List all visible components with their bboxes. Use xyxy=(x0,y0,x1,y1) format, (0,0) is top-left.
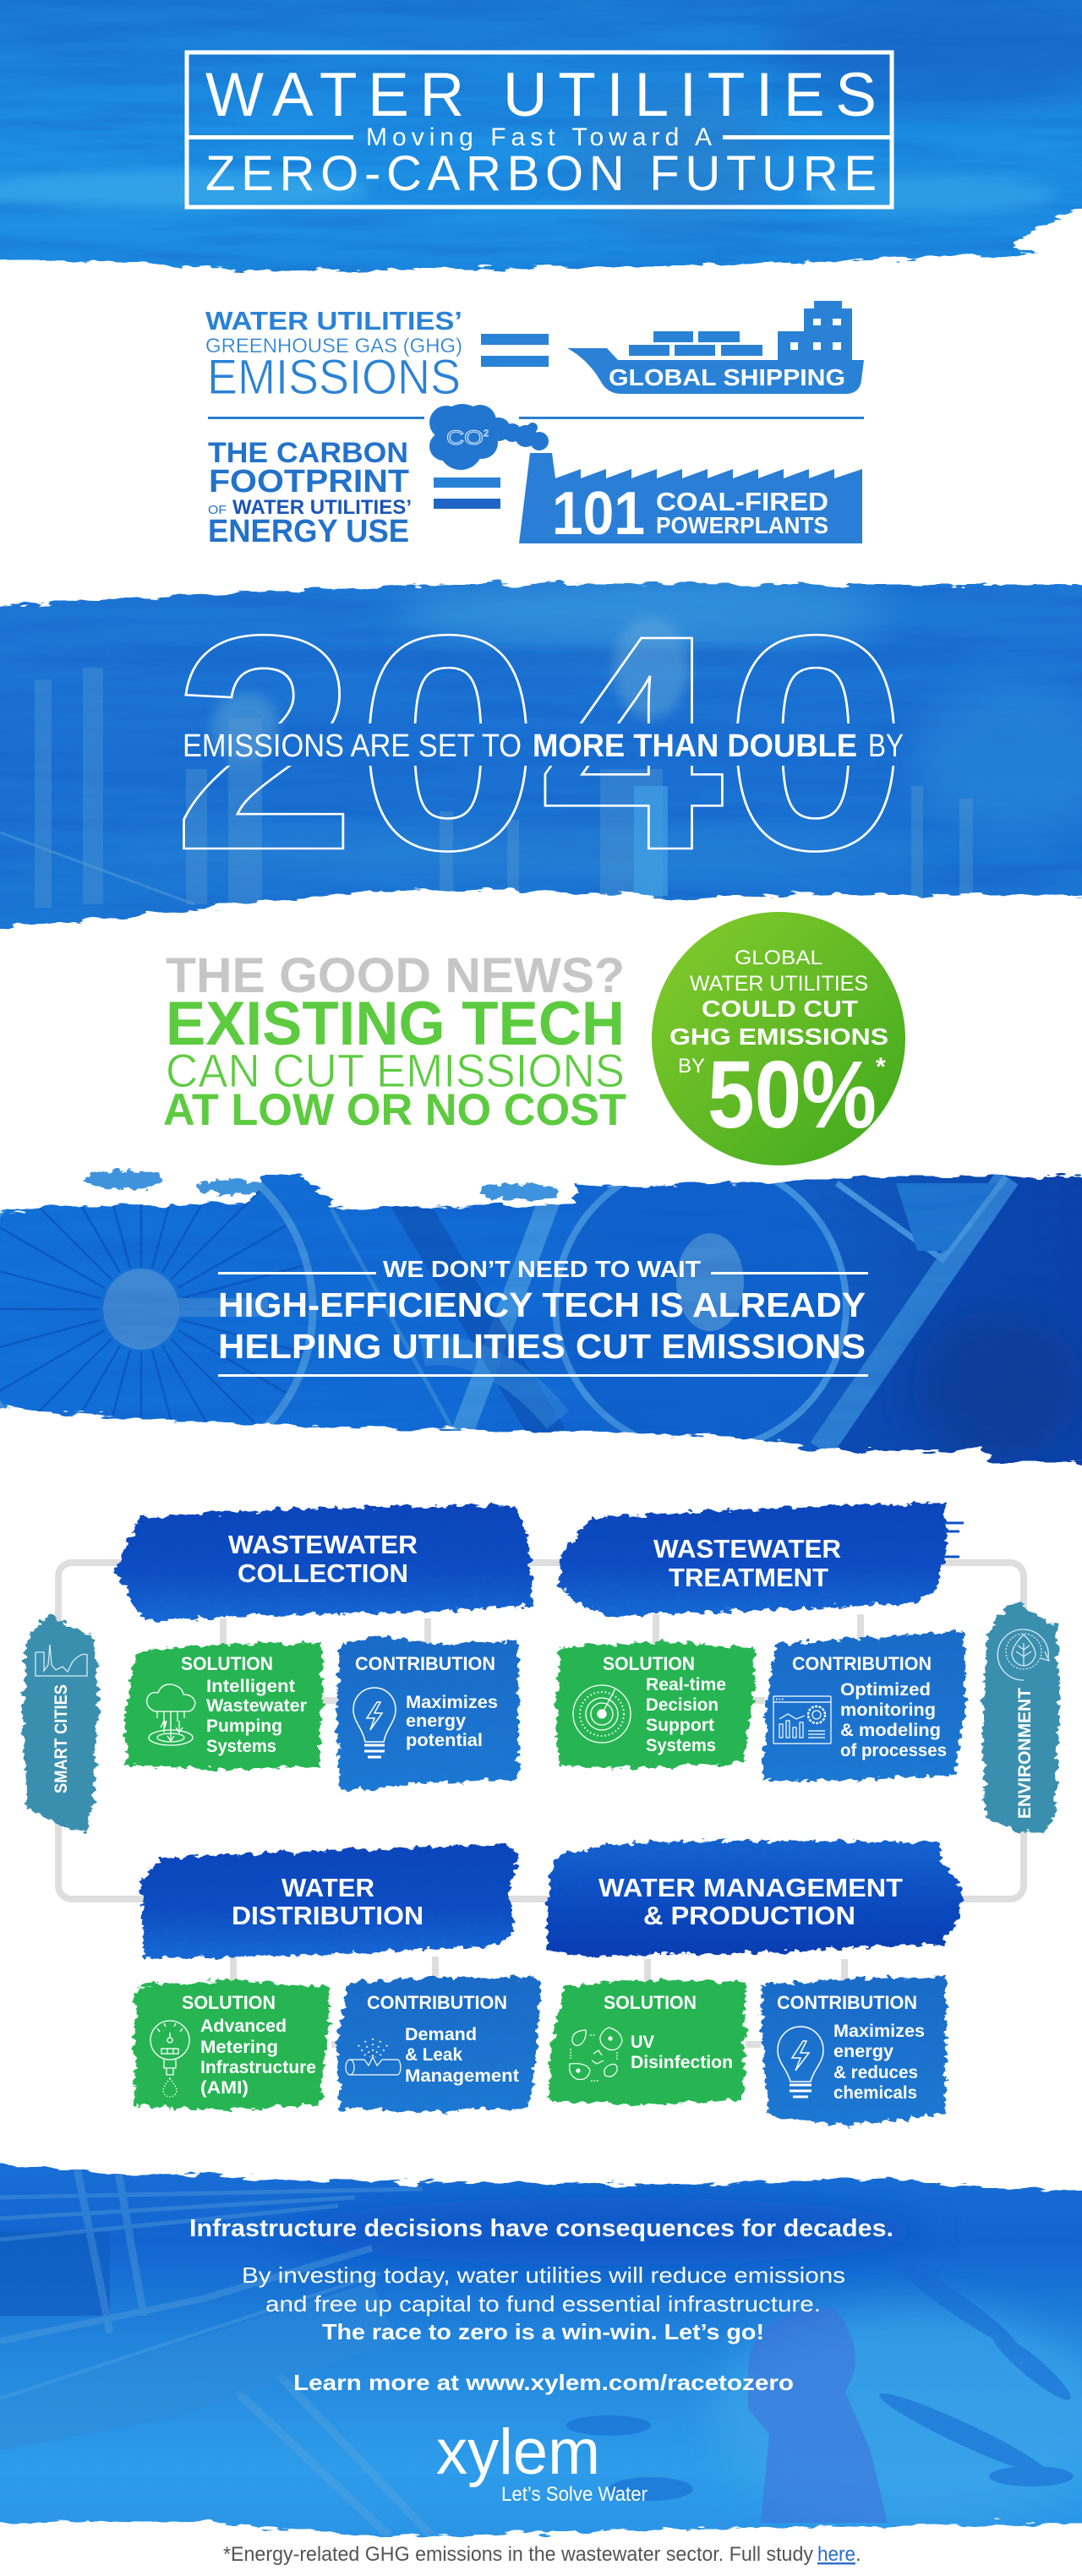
panel: environment xyxy=(982,1603,1060,1834)
heading: carbon footprint xyxy=(208,437,412,549)
contribution card: CONTRIBUTION xyxy=(367,1992,507,2013)
contribution card: & Leak xyxy=(405,2045,462,2065)
contribution card: of processes xyxy=(840,1741,947,1760)
icon: rain cloud over ripple xyxy=(147,1684,195,1745)
contribution card xyxy=(336,1636,519,1792)
icon: light bulb xyxy=(778,2027,823,2097)
brush heading: WASTEWATER xyxy=(653,1534,841,1564)
subtitle with rules: Moving Fast Toward A xyxy=(366,123,712,151)
title: WATER UTILITIES: WATER UTILITIES xyxy=(205,61,877,129)
solution card: SOLUTION xyxy=(181,1653,273,1674)
contribution card: Maximizes xyxy=(406,1693,498,1712)
panel: wastewater treatment xyxy=(556,1503,965,1782)
label: smart cities: SMART CITIES xyxy=(52,1684,71,1793)
splash marks xyxy=(85,1171,560,1200)
contribution card: Maximizes xyxy=(833,2022,925,2041)
heading: carbon footprint: THE CARBON xyxy=(208,437,408,469)
brush heading xyxy=(548,1841,964,1957)
text block: closing message xyxy=(189,2215,893,2395)
title frame xyxy=(187,52,892,207)
contribution card: CONTRIBUTION xyxy=(355,1653,495,1674)
solution card xyxy=(134,1979,330,2109)
contribution card: CONTRIBUTION xyxy=(777,1992,917,2013)
text block: closing message: Learn more at www.xylem.com/racetozero xyxy=(293,2370,794,2395)
solution card: Real-time xyxy=(646,1675,726,1695)
solution card: Disinfection xyxy=(631,2053,733,2072)
text block: closing message: By investing today, water utilities will reduce emissions xyxy=(242,2262,845,2288)
brush heading xyxy=(140,1844,520,1959)
solution card: Support xyxy=(646,1716,714,1735)
logo: xylem: Let’s Solve Water xyxy=(501,2483,648,2506)
contribution card: chemicals xyxy=(833,2083,917,2103)
text block: closing message: The race to zero is a win-win. Let’s go! xyxy=(322,2319,764,2344)
icon: CO2 cloud: CO xyxy=(446,427,484,450)
icon: equals sign xyxy=(481,334,549,367)
icon: coal-fired power plant: 101 xyxy=(552,480,645,548)
contribution card: monitoring xyxy=(840,1700,936,1720)
heading: greenhouse gas emissions: WATER UTILITIES’ xyxy=(205,306,462,336)
heading: high-efficiency tech: HELPING UTILITIES CUT EMISSIONS xyxy=(218,1327,866,1366)
heading: carbon footprint: OF xyxy=(208,503,227,517)
contribution card: Demand xyxy=(405,2025,477,2044)
solution card: Advanced xyxy=(200,2017,287,2036)
contribution card: & modeling xyxy=(840,1721,941,1740)
icon: coal-fired power plant xyxy=(519,453,862,548)
brush heading: WATER MANAGEMENT xyxy=(598,1873,903,1902)
solution card xyxy=(549,1980,746,2104)
solution card: Systems xyxy=(206,1737,276,1756)
brush heading: DISTRIBUTION xyxy=(232,1901,424,1930)
icon: radar xyxy=(573,1685,631,1743)
callout: 50 percent circle: BY xyxy=(678,1055,705,1078)
brush heading: TREATMENT xyxy=(669,1563,828,1592)
heading: high-efficiency tech: HIGH-EFFICIENCY TECH IS ALREADY xyxy=(218,1285,866,1324)
solution card xyxy=(556,1641,755,1768)
icon: container ship xyxy=(567,301,864,394)
icon: monitoring dashboard xyxy=(773,1696,831,1744)
icon: coal-fired power plant: POWERPLANTS xyxy=(656,512,828,538)
panel: high-efficiency tech banner xyxy=(0,1168,1082,1465)
icon: water meter gauge xyxy=(150,2021,189,2097)
panel: good news xyxy=(163,912,905,1165)
title: ZERO-CARBON FUTURE: ZERO-CARBON FUTURE xyxy=(205,146,877,201)
contribution card: & reduces xyxy=(833,2063,918,2082)
solution card: Decision xyxy=(646,1695,719,1715)
contribution card: Optimized xyxy=(840,1680,931,1700)
brush heading xyxy=(115,1505,533,1621)
solution card: Infrastructure xyxy=(200,2058,316,2077)
solution card: (AMI) xyxy=(200,2078,249,2098)
brush heading: COLLECTION xyxy=(238,1558,408,1588)
worker silhouette xyxy=(748,2307,888,2523)
subheading with rules xyxy=(218,1256,868,1282)
callout: 50 percent circle: COULD CUT xyxy=(702,996,858,1022)
heading: carbon footprint: FOOTPRINT xyxy=(209,464,409,499)
panel: water distribution xyxy=(134,1844,539,2111)
text block: existing tech: AT LOW OR NO COST xyxy=(163,1085,626,1135)
solution card: Intelligent xyxy=(206,1677,295,1696)
heading: greenhouse gas emissions: GREENHOUSE GAS (GHG) xyxy=(205,335,462,357)
heading: high-efficiency tech xyxy=(218,1285,868,1377)
solution card: Systems xyxy=(646,1736,716,1755)
label: environment: ENVIRONMENT xyxy=(1015,1688,1035,1819)
statement text: BY xyxy=(868,729,904,764)
callout: 50 percent circle: GLOBAL xyxy=(735,947,822,969)
brush heading xyxy=(558,1503,964,1616)
footnote: here xyxy=(817,2543,855,2566)
solution card: UV xyxy=(631,2033,654,2052)
divider xyxy=(208,417,864,419)
icon: coal-fired power plant: COAL-FIRED xyxy=(656,487,828,516)
brush heading: & PRODUCTION xyxy=(643,1901,855,1930)
text block: closing message: and free up capital to fund essential infrastructure. xyxy=(265,2291,821,2317)
panel: closing banner xyxy=(0,2138,1082,2552)
contribution card xyxy=(762,1631,965,1782)
panel: water management and production xyxy=(548,1841,964,2126)
statement text: MORE THAN DOUBLE xyxy=(533,729,857,764)
heading: the good news: THE GOOD NEWS? xyxy=(166,948,625,1003)
callout: 50 percent circle: * xyxy=(876,1053,886,1081)
clarifier left xyxy=(0,1190,309,1424)
contribution card: potential xyxy=(406,1731,483,1750)
panel: wastewater collection xyxy=(115,1505,533,1792)
statement text xyxy=(183,729,904,764)
panel: smart cities xyxy=(23,1616,98,1832)
flow diagram connectors xyxy=(58,1563,1024,2044)
panel: shipping comparison xyxy=(205,301,864,405)
icon: equals sign xyxy=(434,478,500,509)
heading: carbon footprint: ENERGY USE xyxy=(208,514,409,549)
solution card: Wastewater xyxy=(206,1696,307,1716)
heading: greenhouse gas emissions: EMISSIONS xyxy=(207,350,461,405)
contribution card xyxy=(761,1976,947,2126)
logo: xylem xyxy=(436,2416,648,2506)
solution card: SOLUTION xyxy=(604,1992,697,2013)
icon: leaking pipe xyxy=(346,2038,401,2075)
contribution card: Management xyxy=(405,2066,519,2086)
brush heading: WASTEWATER xyxy=(228,1530,418,1559)
solution card xyxy=(125,1643,323,1770)
footnote: *Energy-related GHG emissions in the wastewater sector. Full study xyxy=(223,2543,813,2566)
panel: carbon footprint comparison xyxy=(208,404,862,549)
subtitle with rules xyxy=(187,123,892,151)
contribution card: energy xyxy=(406,1711,466,1731)
icon: CO2 cloud xyxy=(429,404,549,470)
solution card: SOLUTION xyxy=(603,1653,695,1674)
callout: 50 percent circle xyxy=(652,912,905,1165)
heading: carbon footprint: WATER UTILITIES’ xyxy=(232,496,412,519)
big outlined year 2040: 2040 xyxy=(172,571,908,914)
solution card: SOLUTION xyxy=(182,1992,276,2013)
text block: closing message: Infrastructure decisions have consequences for decades. xyxy=(189,2215,893,2242)
icon: light bulb xyxy=(353,1688,396,1757)
brush heading: WATER xyxy=(281,1873,374,1902)
contribution card: CONTRIBUTION xyxy=(792,1653,932,1674)
icon: CO2 cloud: 2 xyxy=(484,428,489,439)
callout: 50 percent circle: 50% xyxy=(708,1041,877,1148)
text block: existing tech: CAN CUT EMISSIONS xyxy=(166,1044,625,1097)
icon: leaf in cycle xyxy=(997,1629,1049,1680)
icon: city skyline xyxy=(36,1645,87,1676)
footnote: . xyxy=(855,2543,861,2566)
heading: greenhouse gas emissions xyxy=(205,306,462,405)
statement text: EMISSIONS ARE SET TO xyxy=(183,729,522,764)
text block: existing tech xyxy=(163,990,626,1135)
contribution card xyxy=(336,1978,539,2111)
panel: 2040 emissions banner xyxy=(0,566,1082,947)
callout: 50 percent circle: GHG EMISSIONS xyxy=(669,1023,888,1050)
panel: title banner xyxy=(0,0,1082,287)
clarifier right xyxy=(555,1160,846,1451)
solution card: Metering xyxy=(200,2038,278,2057)
contribution card: energy xyxy=(833,2042,893,2061)
callout: 50 percent circle: WATER UTILITIES xyxy=(690,972,868,996)
text block: existing tech: EXISTING TECH xyxy=(166,990,625,1058)
logo: xylem: xylem xyxy=(436,2416,600,2488)
subheading with rules: WE DON’T NEED TO WAIT xyxy=(383,1256,701,1282)
solution card: Pumping xyxy=(206,1716,282,1736)
icon: container ship: GLOBAL SHIPPING xyxy=(609,364,845,390)
icon: UV disinfection cycle xyxy=(570,2028,622,2081)
